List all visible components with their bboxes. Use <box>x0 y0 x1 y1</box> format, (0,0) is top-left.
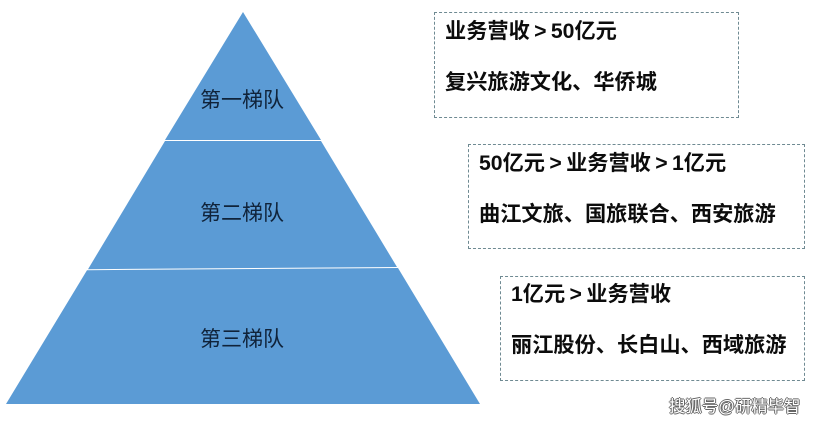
callout: tier 2 <box>468 144 805 249</box>
tier 3 segment: 第三梯队 <box>200 328 284 351</box>
tier 3 revenue range: 1亿元 > 业务营收 <box>511 283 671 306</box>
tier 3 segment <box>6 268 480 404</box>
tier 2 segment: 第二梯队 <box>200 202 284 225</box>
tier 1 segment <box>165 12 321 140</box>
watermark: 搜狐号@研精毕智 <box>669 398 800 416</box>
tier 2 companies: 曲江文旅、国旅联合、西安旅游 <box>479 203 776 226</box>
callout: tier 1 <box>434 12 739 118</box>
tier 2 segment <box>88 141 397 269</box>
tier 2 revenue range: 50亿元 > 业务营收 > 1亿元 <box>479 152 726 175</box>
callout: tier 3 <box>500 276 805 381</box>
tier 1 companies: 复兴旅游文化、华侨城 <box>445 71 657 94</box>
tier 1 segment: 第一梯队 <box>200 89 284 112</box>
tier 1 revenue range: 业务营收 > 50亿元 <box>445 20 617 43</box>
tier 3 companies: 丽江股份、长白山、西域旅游 <box>511 334 786 357</box>
